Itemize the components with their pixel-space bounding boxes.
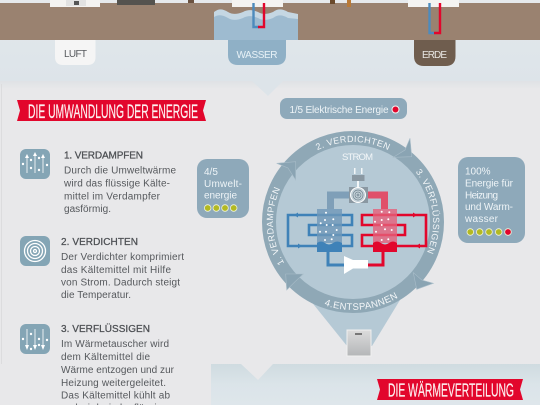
outdoor unit xyxy=(117,0,155,5)
red circuit xyxy=(362,195,426,265)
body text: das Kältemittel mit Hilfe xyxy=(61,265,171,276)
body text: wird das flüssige Kälte- xyxy=(63,178,170,190)
card: total energy: wasser xyxy=(464,214,499,225)
body text: mittel im Verdampfer xyxy=(64,192,161,202)
arrowhead: to expansion xyxy=(413,273,433,289)
ring xyxy=(269,138,437,306)
panel: conversion section background xyxy=(0,81,540,364)
body text xyxy=(61,252,184,301)
tree stems xyxy=(330,0,351,7)
card: total energy: Energie für xyxy=(465,178,514,190)
house: air xyxy=(50,0,100,7)
panel: energy sources xyxy=(0,0,540,82)
ring label: verdichten: 2. VERDICHTEN xyxy=(316,136,390,150)
ring label: verdampfen: 1. VERDAMPFEN xyxy=(266,187,284,265)
label: Strom: STROM xyxy=(342,152,373,163)
icon: rising arrows xyxy=(20,149,50,179)
tree stem xyxy=(188,0,194,3)
house: water xyxy=(232,0,283,7)
evaporator tank xyxy=(317,209,342,252)
banner: Die Umwandlung der Energie: DIE UMWANDLUNG DER ENERGIE xyxy=(28,102,198,123)
card: environmental energy xyxy=(197,159,249,218)
disk xyxy=(275,144,431,300)
banner: Die Umwandlung der Energie xyxy=(17,100,206,123)
ring label: verflüssigen: 3. VERFLÜSSIGEN xyxy=(416,169,440,254)
step 1: Verdampfen xyxy=(20,149,176,215)
body text: gasförmig. xyxy=(64,204,111,215)
diagram: heat pump cycle xyxy=(262,131,444,356)
body text: Heizung weitergeleitet. xyxy=(61,378,166,389)
panel: heat distribution section xyxy=(211,364,540,405)
body text: die Temperatur. xyxy=(61,290,131,301)
body text: Im Wärmetauscher wird xyxy=(61,339,169,350)
body text: Wärme entzogen und zur xyxy=(61,365,175,376)
body text xyxy=(63,166,176,215)
card: environmental energy: energie xyxy=(204,190,237,202)
compressor xyxy=(349,187,368,203)
ground band xyxy=(0,3,540,40)
icon: plug xyxy=(352,168,364,188)
pill: electric energy: 1/5 Elektrische Energie xyxy=(290,105,389,116)
step 3: Verflüssigen xyxy=(20,323,175,405)
card: environmental energy: Umwelt- xyxy=(204,179,242,190)
body text: Das Kältemittel kühlt ab xyxy=(61,390,170,402)
body text: dem Kältemittel die xyxy=(61,352,150,363)
arrowhead: to condenser xyxy=(393,138,412,157)
funnel to device xyxy=(310,300,400,346)
card: total energy: Heizung xyxy=(465,190,498,202)
condenser tank xyxy=(373,209,397,252)
arrowhead: to compressor xyxy=(277,162,296,180)
device: heat pump unit xyxy=(347,330,371,356)
label: Wasser xyxy=(228,40,286,65)
earth pipes xyxy=(430,3,440,33)
body text: Der Verdichter komprimiert xyxy=(61,252,184,263)
card: total energy: 100% xyxy=(465,166,491,178)
card: total energy: und Warm- xyxy=(465,202,513,213)
expansion valve xyxy=(344,256,368,274)
body text xyxy=(61,339,175,405)
step 2: Verdichten xyxy=(20,236,184,301)
label: Erde: ERDE xyxy=(422,50,447,61)
icon: falling arrows xyxy=(20,324,50,354)
pill: electric energy xyxy=(280,98,407,119)
card: total energy xyxy=(458,157,525,243)
heading: 3. VERFLÜSSIGEN xyxy=(61,323,150,335)
label: Wasser: WASSER xyxy=(236,50,278,61)
label: Luft xyxy=(55,40,96,65)
card: environmental energy: 4/5 xyxy=(204,167,218,178)
arrowhead: to evaporator xyxy=(286,274,303,290)
body text: von Strom. Dadurch steigt xyxy=(61,278,180,288)
heading: 2. VERDICHTEN xyxy=(61,237,138,248)
house: earth xyxy=(408,0,459,7)
icon: spiral xyxy=(20,236,50,266)
ring label: entspannen: 4.ENTSPANNEN xyxy=(324,292,398,310)
body text: Durch die Umweltwärme xyxy=(64,166,176,176)
blue circuit xyxy=(288,195,352,265)
label: Erde xyxy=(414,40,456,66)
label: Luft: LUFT xyxy=(64,49,87,60)
water pipes xyxy=(254,3,264,27)
water basin xyxy=(214,9,298,40)
heading: 1. VERDAMPFEN xyxy=(64,150,143,162)
